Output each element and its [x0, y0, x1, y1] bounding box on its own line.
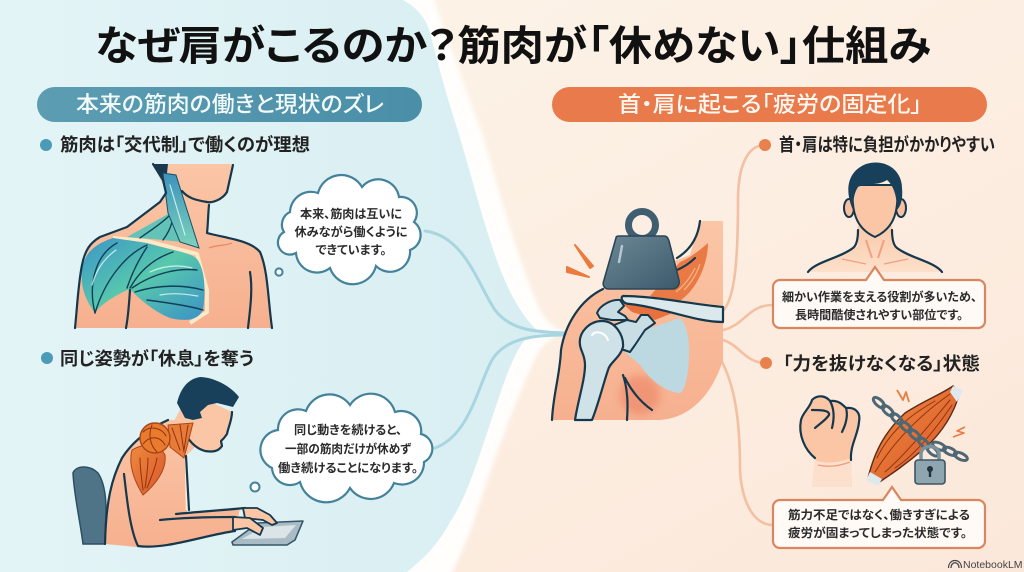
panel heading: right: 首・肩に起こる「疲労の固定化」 — [618, 92, 922, 117]
callout: repetitive work: 細かい作業を支える役割が多いため、 — [782, 289, 977, 304]
callout: thought bubble 2: 働き続けることになります。 — [278, 460, 418, 475]
callout: thought bubble 1: できています。 — [315, 243, 386, 257]
panel heading: right — [552, 87, 987, 122]
callout: thought bubble 2: 同じ動きを続けると、 — [294, 422, 402, 437]
illustration: shoulder with blue-green muscles — [75, 164, 272, 328]
illustration: man hunched at keyboard — [73, 377, 303, 547]
panel heading: left — [37, 87, 422, 122]
illustration: clenched fist — [800, 396, 859, 487]
connectors: right peach lines — [720, 145, 773, 525]
illustration: chained muscle with padlock — [866, 386, 969, 486]
bullet heading: cannot relax: 「力を抜けなくなる」状態 — [783, 353, 980, 374]
watermark: NotebookLM: NotebookLM — [963, 559, 1023, 571]
bullet heading: same posture: 同じ姿勢が「休息」を奪う — [60, 348, 254, 369]
bullet heading: muscle rotation: 筋肉は「交代制」で働くのが理想 — [60, 134, 310, 155]
callout: not lack of strength: 筋力不足ではなく、働きすぎによる — [788, 507, 970, 522]
background: blue left side — [0, 0, 562, 572]
connectors: left blue lines — [425, 231, 564, 448]
callout: repetitive work: 長時間酷使されやすい部位です。 — [795, 307, 963, 322]
callout: not lack of strength: 疲労が固まってしまった状態です。 — [788, 525, 967, 540]
callout: not lack of strength — [773, 487, 985, 548]
illustration: man's head and shoulders — [808, 162, 942, 272]
callout: thought bubble 1: 休みながら働くように — [294, 224, 408, 239]
callout: thought bubble 2 — [250, 394, 432, 502]
panel heading: left: 本来の筋肉の働きと現状のズレ — [76, 92, 384, 117]
illustration: shoulder joint under weight — [552, 212, 723, 420]
callout: thought bubble 1 — [275, 175, 421, 284]
background: white transition band — [395, 0, 565, 572]
callout: repetitive work — [773, 267, 985, 328]
callout: thought bubble 1: 本来、筋肉は互いに — [300, 206, 402, 221]
title: なぜ肩がこるのか？筋肉が「休めない」仕組み — [95, 23, 931, 69]
callout: thought bubble 2: 一部の筋肉だけが休めず — [285, 441, 412, 456]
